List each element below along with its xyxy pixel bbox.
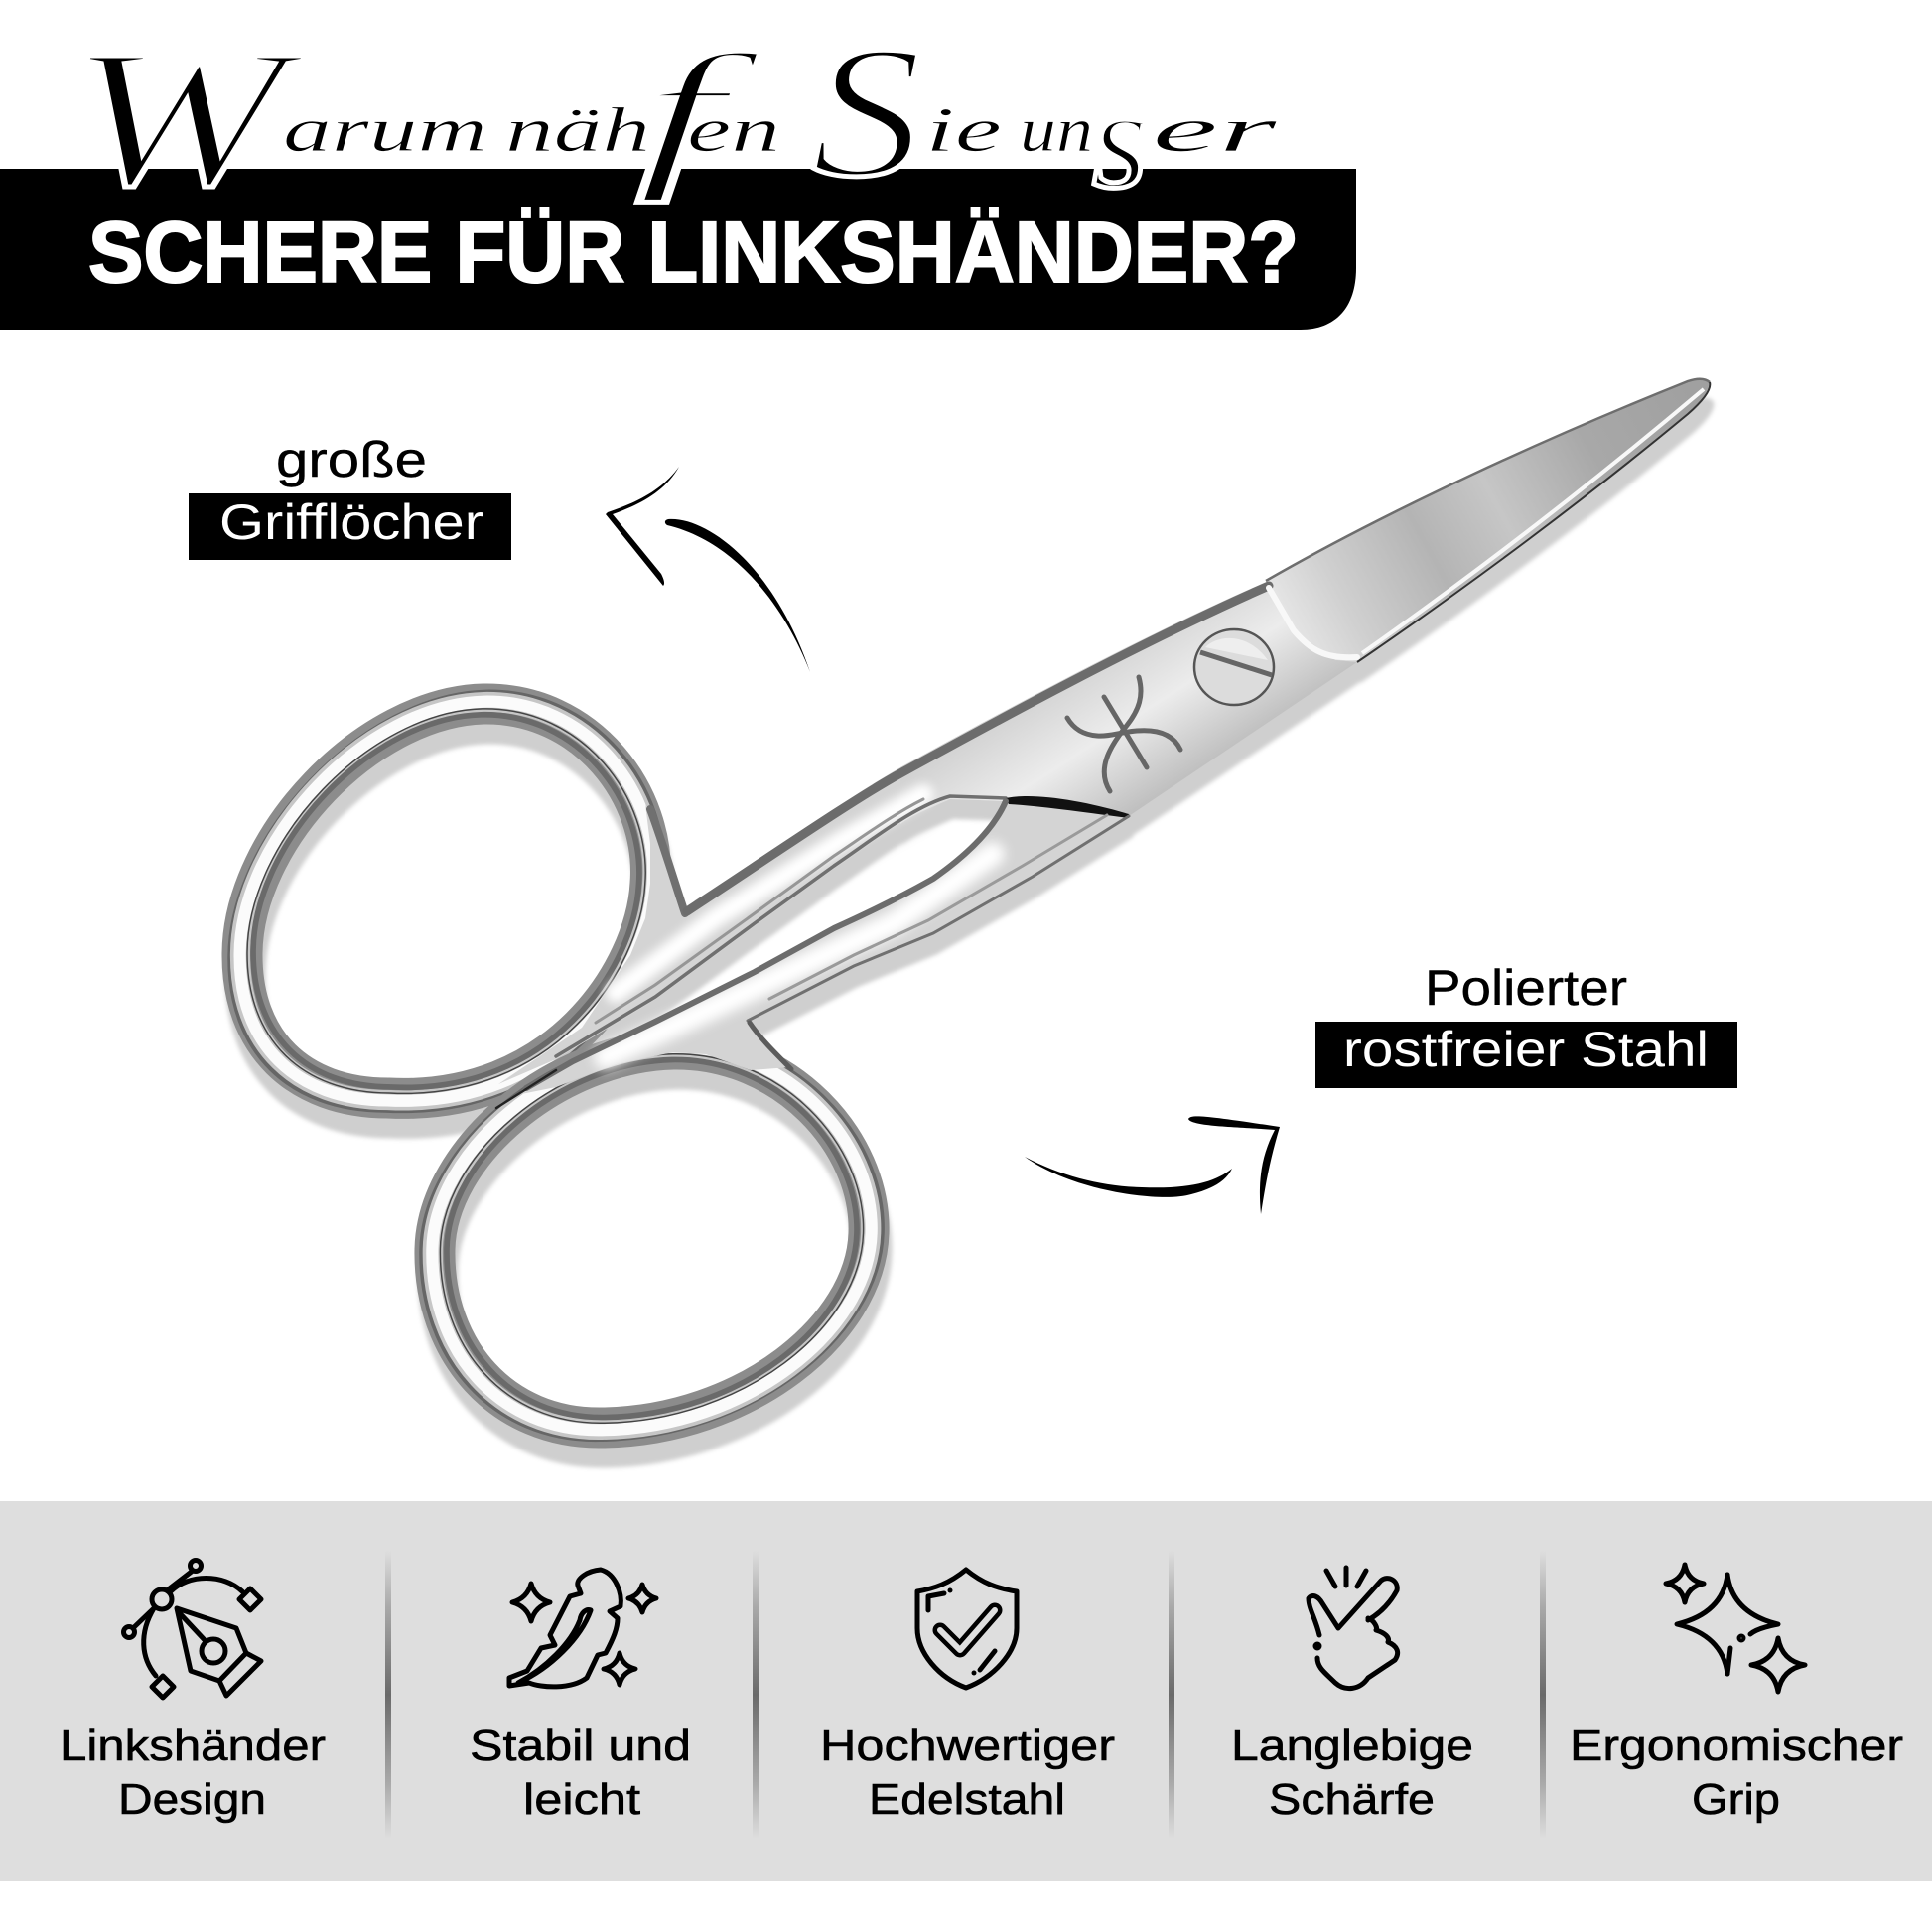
label: Stabil und leicht [470, 1722, 691, 1824]
arrow to steel [1025, 1116, 1280, 1214]
label: Ergonomischer Grip: Ergonomischer [1570, 1722, 1903, 1770]
icon: finger snap [1309, 1568, 1398, 1689]
arrow to ring [606, 467, 810, 672]
label: Hochwertiger Edelstahl [820, 1722, 1115, 1824]
scissors photo [230, 379, 1710, 1439]
header text: SCHERE FÜR LINKSHÄNDER? [88, 205, 1299, 301]
icon: sparkles [1666, 1565, 1805, 1692]
callout: grosse Grifflöcher: Grifflöcher [219, 494, 483, 550]
label: Stabil und leicht: leicht [523, 1775, 640, 1824]
label: Linkshänder Design: Design [118, 1775, 266, 1824]
label: Ergonomischer Grip [1570, 1722, 1903, 1824]
callout: Polierter rostfreier Stahl: Polierter [1425, 960, 1627, 1016]
callout: grosse Grifflöcher: große [276, 432, 427, 487]
label: Stabil und leicht: Stabil und [470, 1722, 691, 1770]
label: Linkshänder Design: Linkshänder [60, 1722, 326, 1770]
script title: s [1092, 61, 1148, 218]
lower finger ring [422, 1038, 882, 1439]
label: Ergonomischer Grip: Grip [1692, 1775, 1780, 1824]
feature panel [0, 1501, 1932, 1881]
callout: Polierter rostfreier Stahl: rostfreier Stahl [1343, 1022, 1709, 1077]
divider 2 [753, 1551, 759, 1839]
header bar [0, 169, 1356, 330]
script title: W [69, 9, 306, 226]
divider 4 [1540, 1551, 1546, 1839]
script title: näh [505, 94, 650, 165]
label: Langlebige Schärfe: Langlebige [1231, 1722, 1473, 1770]
script title: un [1020, 94, 1093, 165]
label: Hochwertiger Edelstahl: Hochwertiger [820, 1722, 1115, 1770]
pivot screw [1194, 629, 1274, 705]
script title: f [635, 20, 763, 203]
lower shank highlight [606, 854, 993, 1057]
shank metal lines [556, 586, 1357, 1056]
script title [69, 8, 1280, 226]
icon: shield check [917, 1570, 1017, 1688]
pivot plate [900, 581, 1357, 824]
script title: S [811, 8, 922, 216]
script title: er [1152, 94, 1280, 165]
script title: ie [925, 94, 1002, 165]
lower shank [496, 796, 1129, 1108]
divider 1 [385, 1551, 391, 1839]
engraved logo [1067, 677, 1180, 791]
lower shank edges [496, 801, 1129, 1108]
icon: pen tool [123, 1561, 261, 1698]
label: Linkshänder Design [60, 1722, 326, 1824]
upper shank and pivot [498, 581, 1357, 1084]
blade [1266, 379, 1710, 662]
label: Hochwertiger Edelstahl: Edelstahl [869, 1775, 1065, 1824]
seam [1006, 796, 1129, 818]
callout: Polierter rostfreier Stahl [1315, 960, 1737, 1088]
label: Langlebige Schärfe [1231, 1722, 1473, 1824]
divider 3 [1169, 1551, 1174, 1839]
label: Langlebige Schärfe: Schärfe [1269, 1775, 1435, 1824]
shank highlight [616, 794, 923, 993]
script title: en [687, 94, 780, 165]
callout: grosse Grifflöcher [189, 432, 511, 560]
script title: arum [283, 94, 487, 165]
upper finger ring [230, 692, 663, 1111]
icon: feather [509, 1570, 656, 1687]
